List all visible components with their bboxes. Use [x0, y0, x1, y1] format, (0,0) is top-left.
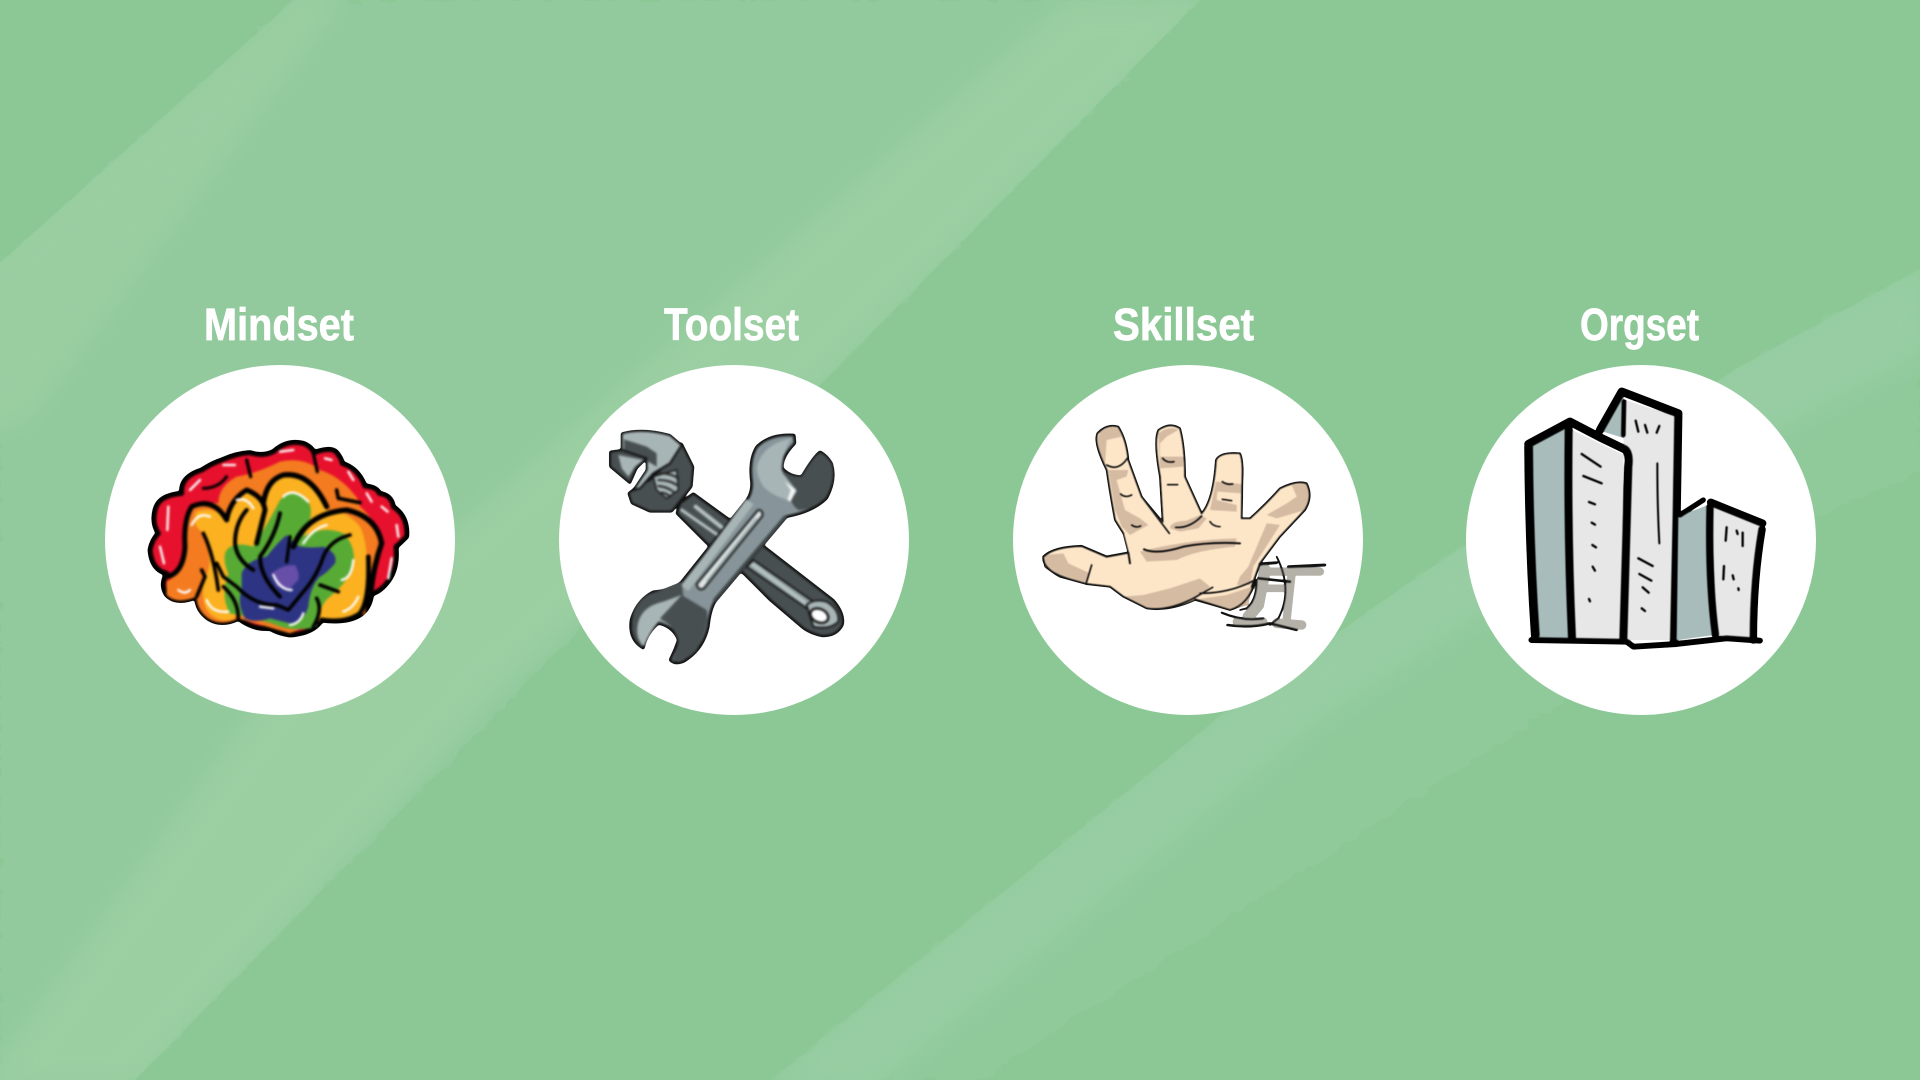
- circle: Orgset: [1466, 365, 1816, 715]
- hand line work: [1043, 425, 1310, 610]
- ground line: [1531, 638, 1760, 647]
- panel: Orgset: [1466, 299, 1816, 715]
- building: left tower: [1527, 422, 1629, 640]
- heading: Orgset: Orgset: [1580, 299, 1699, 350]
- circle: Skillset: [1013, 365, 1363, 715]
- skin shading: [1045, 427, 1310, 610]
- building: middle tower: [1598, 392, 1678, 640]
- icon: crossed wrenches: [610, 431, 843, 663]
- highlights: [160, 450, 398, 625]
- cuff shadow: [1237, 570, 1320, 625]
- icon: office buildings: [1527, 392, 1763, 647]
- icon part: open-end wrench: [631, 435, 833, 663]
- cuff lines: [1222, 557, 1325, 630]
- panel: Mindset: [105, 299, 455, 715]
- panel: Skillset: [1013, 299, 1363, 715]
- circle: Toolset: [559, 365, 909, 715]
- icon: rainbow brain: [150, 442, 407, 635]
- building: right block: [1677, 500, 1763, 640]
- icon part: adjustable wrench: [610, 431, 843, 636]
- heading: Skillset: Skillset: [1113, 299, 1254, 350]
- heading: Mindset: Mindset: [204, 299, 354, 350]
- panel: Toolset: [559, 299, 909, 715]
- icon: reaching hand: [1043, 425, 1325, 630]
- outline strokes: [167, 453, 382, 627]
- circle: Mindset: [105, 365, 455, 715]
- heading: Toolset: Toolset: [664, 299, 799, 350]
